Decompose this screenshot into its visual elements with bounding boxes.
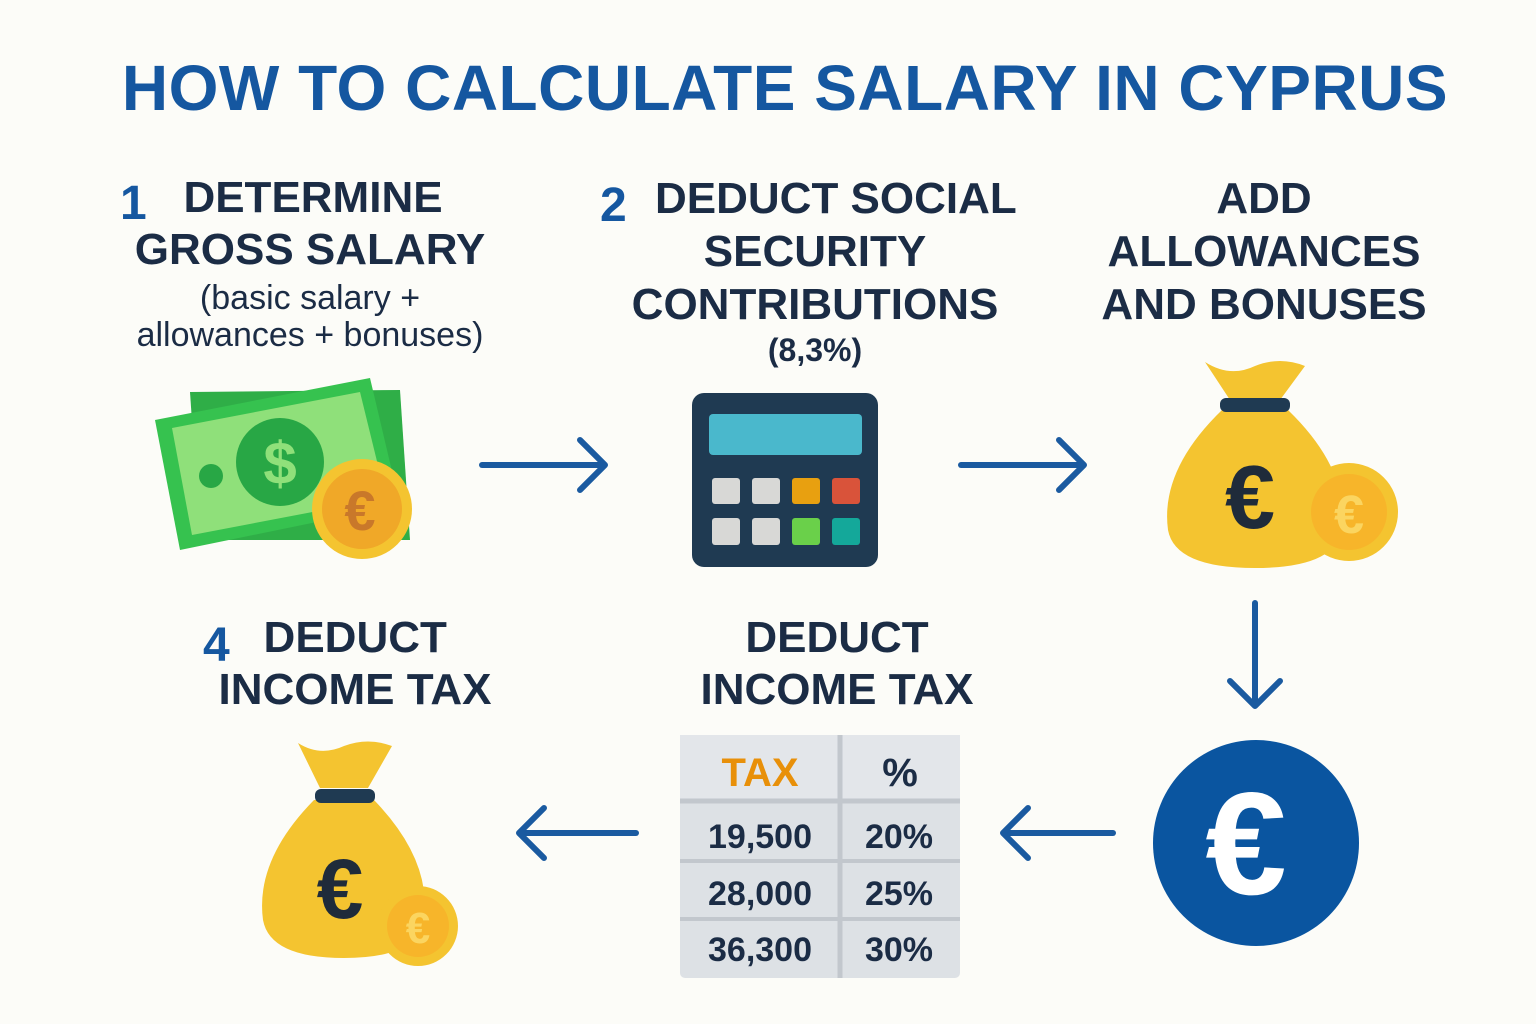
icon: calculator [692, 393, 878, 567]
arrow 2 to 3 [961, 440, 1084, 490]
icon: money bag step 4: € [406, 904, 430, 953]
icon: money bag step 4 [262, 742, 458, 966]
number 1: 1 [120, 177, 147, 230]
step 1 note: allowances + bonuses) [137, 316, 483, 354]
middle heading: DEDUCT [745, 613, 929, 662]
tax table: 20% [865, 818, 933, 856]
number 2: 2 [600, 179, 627, 232]
arrow euro to table [1003, 808, 1113, 858]
icon: euro circle: € [1205, 762, 1287, 925]
step 4 title [219, 613, 491, 714]
step 2 heading [600, 174, 1017, 368]
step 2 title: SECURITY [704, 227, 926, 276]
step 2 rate: (8,3%) [768, 332, 862, 368]
tax table [680, 735, 960, 978]
tax table: 28,000 [708, 875, 812, 913]
arrow 1 to 2 [482, 440, 605, 490]
icon: money bag step 4: € [317, 842, 363, 936]
step 3 heading: ADD [1216, 174, 1312, 223]
title: HOW TO CALCULATE SALARY IN CYPRUS [122, 52, 1448, 124]
arrow table to step 4 [519, 808, 636, 858]
middle heading [701, 613, 973, 714]
step 1 note: (basic salary + [200, 279, 420, 317]
icon: money bag with coin: € [1334, 485, 1364, 545]
step 1 title: GROSS SALARY [135, 225, 485, 274]
step 1 note [137, 279, 483, 354]
icon: euro circle [1153, 740, 1359, 946]
step 1 title: DETERMINE [183, 173, 443, 222]
step 3 heading: ALLOWANCES [1108, 227, 1420, 276]
step 1 title [135, 173, 485, 274]
icon: money bag with coin [1167, 361, 1398, 568]
tax table: 36,300 [708, 931, 812, 969]
step 4 heading [203, 613, 491, 714]
icon: money bag with coin: € [1225, 448, 1275, 548]
middle heading: INCOME TAX [701, 665, 973, 714]
step 2 title: DEDUCT SOCIAL [655, 174, 1017, 223]
icon: money bills with euro coin [155, 378, 412, 559]
step 1 heading [120, 173, 485, 354]
step 2 title [632, 174, 1017, 329]
arrow down [1230, 603, 1280, 706]
step 4 title: DEDUCT [264, 613, 447, 662]
step 4 title: INCOME TAX [219, 665, 491, 714]
step 3 heading: AND BONUSES [1101, 280, 1427, 329]
tax table: % [882, 751, 918, 795]
tax table: 25% [865, 875, 933, 913]
step 3 heading [1101, 174, 1427, 329]
tax table: 19,500 [708, 818, 812, 856]
tax table: TAX [721, 751, 799, 795]
icon: money bills with euro coin: $ [263, 430, 297, 497]
number 4: 4 [203, 619, 230, 672]
tax table: 30% [865, 931, 933, 969]
icon: money bills with euro coin: € [344, 479, 376, 542]
step 2 title: CONTRIBUTIONS [632, 280, 998, 329]
